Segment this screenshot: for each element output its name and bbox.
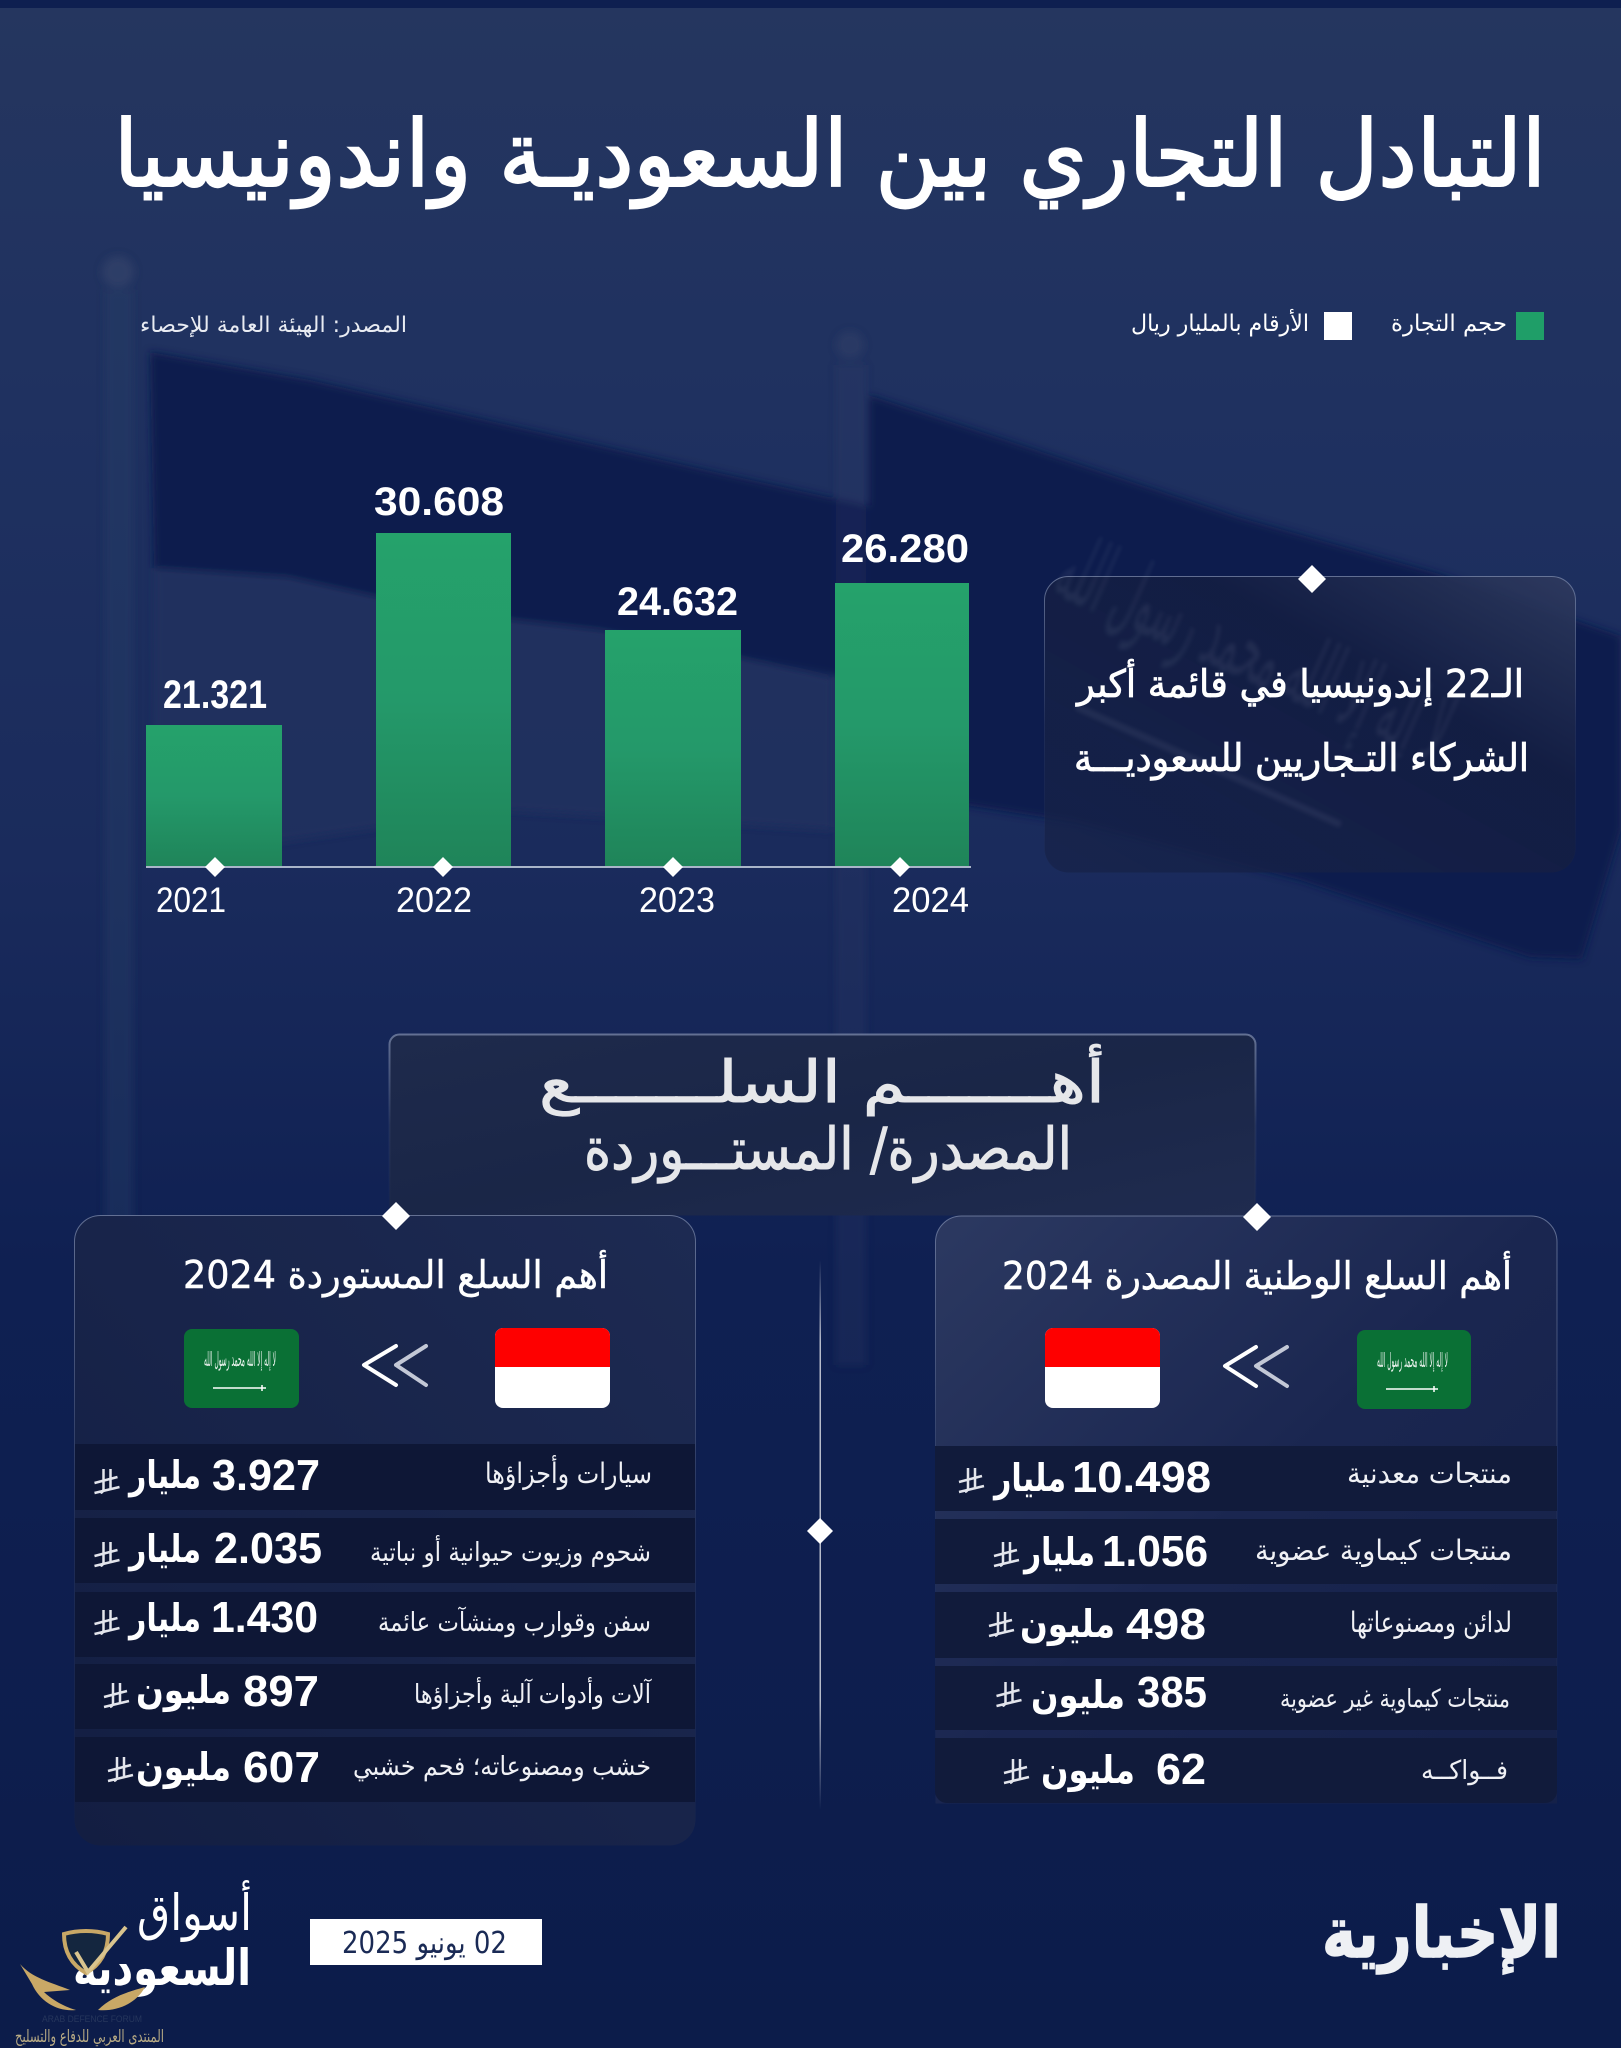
emblem caption: ARAB DEFENCE FORUM bbox=[42, 2014, 142, 2024]
panel: imports: لا إله إلا الله محمد رسول الله bbox=[204, 1347, 276, 1372]
row: fats and oils: مليار bbox=[127, 1527, 201, 1571]
icon: riyal bbox=[108, 1757, 133, 1781]
panel: exports: لا إله إلا الله محمد رسول الله bbox=[1377, 1348, 1448, 1373]
bar 2023 bbox=[605, 580, 741, 920]
row: fruit bbox=[935, 1738, 1557, 1803]
row: minerals: منتجات معدنية bbox=[1347, 1457, 1512, 1490]
row: machinery: آلات وأدوات آلية وأجزاؤها bbox=[414, 1676, 653, 1710]
logo: Al Ekhbariya: الإخبارية bbox=[1322, 1892, 1561, 1975]
row: ships bbox=[75, 1592, 695, 1657]
date badge bbox=[310, 1919, 542, 1965]
row: fats and oils bbox=[75, 1518, 695, 1583]
arrow: imports direction bbox=[364, 1346, 426, 1385]
row: plastics: لدائن ومصنوعاتها bbox=[1350, 1606, 1512, 1639]
date badge: 02 يونيو 2025 bbox=[342, 1926, 507, 1961]
legend: الأرقام بالمليار ريال bbox=[1131, 309, 1309, 337]
bar 2024: 26.280 bbox=[841, 527, 969, 571]
chart axis with markers bbox=[146, 857, 971, 877]
legend: حجم التجارة bbox=[1391, 311, 1507, 337]
legend bbox=[1131, 309, 1544, 340]
row: organic chemicals: 1.056 bbox=[1102, 1527, 1208, 1576]
bar chart bbox=[146, 480, 971, 920]
row: inorganic chemicals: 385 bbox=[1137, 1668, 1207, 1717]
icon: riyal bbox=[94, 1610, 120, 1634]
row: minerals: مليار bbox=[992, 1456, 1066, 1500]
bar 2022 bbox=[374, 480, 511, 920]
callout text: الشركاء التـجاريين للسعوديـــة bbox=[1074, 736, 1529, 781]
row: organic chemicals: منتجات كيماوية عضوية bbox=[1255, 1534, 1512, 1567]
row: machinery: مليون bbox=[136, 1668, 231, 1712]
panel: imports bbox=[74, 1202, 696, 1846]
row: ships: مليار bbox=[127, 1596, 201, 1640]
flag: Saudi Arabia bbox=[184, 1329, 299, 1408]
bar 2021: 21.321 bbox=[163, 673, 267, 717]
row: fats and oils: شحوم وزيوت حيوانية أو نباتية bbox=[370, 1534, 651, 1568]
source note: المصدر: الهيئة العامة للإحصاء bbox=[140, 313, 407, 338]
bar 2023: 24.632 bbox=[617, 580, 738, 624]
central vertical divider bbox=[807, 1260, 833, 1810]
logo: Saudi markets: أسواق bbox=[137, 1880, 252, 1942]
imports marker bbox=[382, 1202, 410, 1230]
logo: Saudi markets: السعودية bbox=[73, 1939, 251, 1998]
icon: riyal bbox=[1004, 1759, 1029, 1783]
panel: ranking callout bbox=[1011, 513, 1576, 872]
row: minerals bbox=[935, 1446, 1557, 1511]
icon: riyal bbox=[94, 1542, 120, 1566]
icon: riyal bbox=[989, 1612, 1014, 1636]
row: inorganic chemicals bbox=[935, 1666, 1557, 1730]
row: cars: سيارات وأجزاؤها bbox=[485, 1454, 652, 1490]
row: cars: 3.927 bbox=[212, 1451, 320, 1500]
logo: Saudi markets bbox=[73, 1880, 252, 1998]
row: inorganic chemicals: منتجات كيماوية غير عضوية bbox=[1280, 1684, 1510, 1714]
callout marker bbox=[1298, 565, 1326, 593]
bar 2021 bbox=[146, 673, 282, 920]
emblem wings bbox=[20, 1964, 145, 2010]
bar 2024: 2024 bbox=[892, 881, 969, 920]
icon: riyal bbox=[104, 1683, 129, 1707]
panel: section heading bbox=[390, 1034, 1256, 1216]
callout text bbox=[1074, 659, 1529, 781]
row: cars: مليار bbox=[127, 1453, 201, 1497]
icon: riyal bbox=[996, 1682, 1022, 1706]
title: التبادل التجاري بين السعوديـة واندونيسيا bbox=[114, 101, 1546, 209]
row: machinery: 897 bbox=[243, 1667, 319, 1716]
arrow: exports direction bbox=[1225, 1347, 1287, 1386]
flag: Indonesia bbox=[495, 1328, 610, 1408]
row: wood: خشب ومصنوعاته؛ فحم خشبي bbox=[353, 1752, 651, 1782]
imports heading: أهم السلع المستوردة 2024 bbox=[183, 1250, 608, 1298]
row: plastics: 498 bbox=[1126, 1600, 1206, 1649]
row: inorganic chemicals: مليون bbox=[1031, 1673, 1125, 1717]
exports marker bbox=[1243, 1203, 1271, 1231]
faint flag calligraphy bbox=[1011, 513, 1469, 852]
emblem check mark bbox=[76, 1927, 126, 1972]
row: ships: سفن وقوارب ومنشآت عائمة bbox=[378, 1606, 651, 1638]
row: wood bbox=[75, 1737, 695, 1802]
icon: riyal bbox=[94, 1469, 120, 1493]
bar 2023: 2023 bbox=[639, 881, 715, 920]
exports heading: أهم السلع الوطنية المصدرة 2024 bbox=[1002, 1251, 1512, 1299]
icon: riyal bbox=[959, 1468, 984, 1492]
row: plastics: مليون bbox=[1020, 1602, 1115, 1646]
emblem shield bbox=[64, 1931, 108, 1973]
row: fruit: مليون bbox=[1041, 1748, 1135, 1792]
row: wood: 607 bbox=[243, 1743, 320, 1792]
row: fruit: فــواكــه bbox=[1421, 1756, 1508, 1786]
callout text: الـ22 إندونيسيا في قائمة أكبر bbox=[1075, 659, 1524, 707]
row: fruit: 62 bbox=[1156, 1745, 1206, 1794]
bar 2022: 2022 bbox=[396, 881, 472, 920]
row: wood: مليون bbox=[136, 1745, 231, 1789]
row: ships: 1.430 bbox=[211, 1593, 318, 1642]
icon: riyal bbox=[994, 1542, 1019, 1566]
row: organic chemicals bbox=[935, 1519, 1557, 1584]
row: minerals: 10.498 bbox=[1072, 1453, 1211, 1502]
bar 2024 bbox=[835, 527, 969, 920]
row: organic chemicals: مليار bbox=[1022, 1530, 1095, 1574]
watermark caption: المنتدى العربي للدفاع والتسليح bbox=[15, 2027, 164, 2047]
bar 2022: 30.608 bbox=[374, 480, 504, 524]
bar 2021: 2021 bbox=[156, 881, 226, 920]
flag: Saudi Arabia bbox=[1357, 1330, 1471, 1409]
row: cars bbox=[75, 1444, 695, 1510]
panel: exports bbox=[935, 1203, 1557, 1804]
flag: Indonesia bbox=[1045, 1328, 1160, 1408]
row: machinery bbox=[75, 1664, 695, 1729]
panel: section heading: المصدرة/ المستـــوردة bbox=[584, 1115, 1072, 1184]
panel: section heading: أهـــــــم السلـــــــع bbox=[539, 1044, 1105, 1116]
row: fats and oils: 2.035 bbox=[214, 1524, 322, 1573]
watermark: defence forum emblem bbox=[20, 1927, 145, 2024]
row: plastics bbox=[935, 1592, 1557, 1658]
